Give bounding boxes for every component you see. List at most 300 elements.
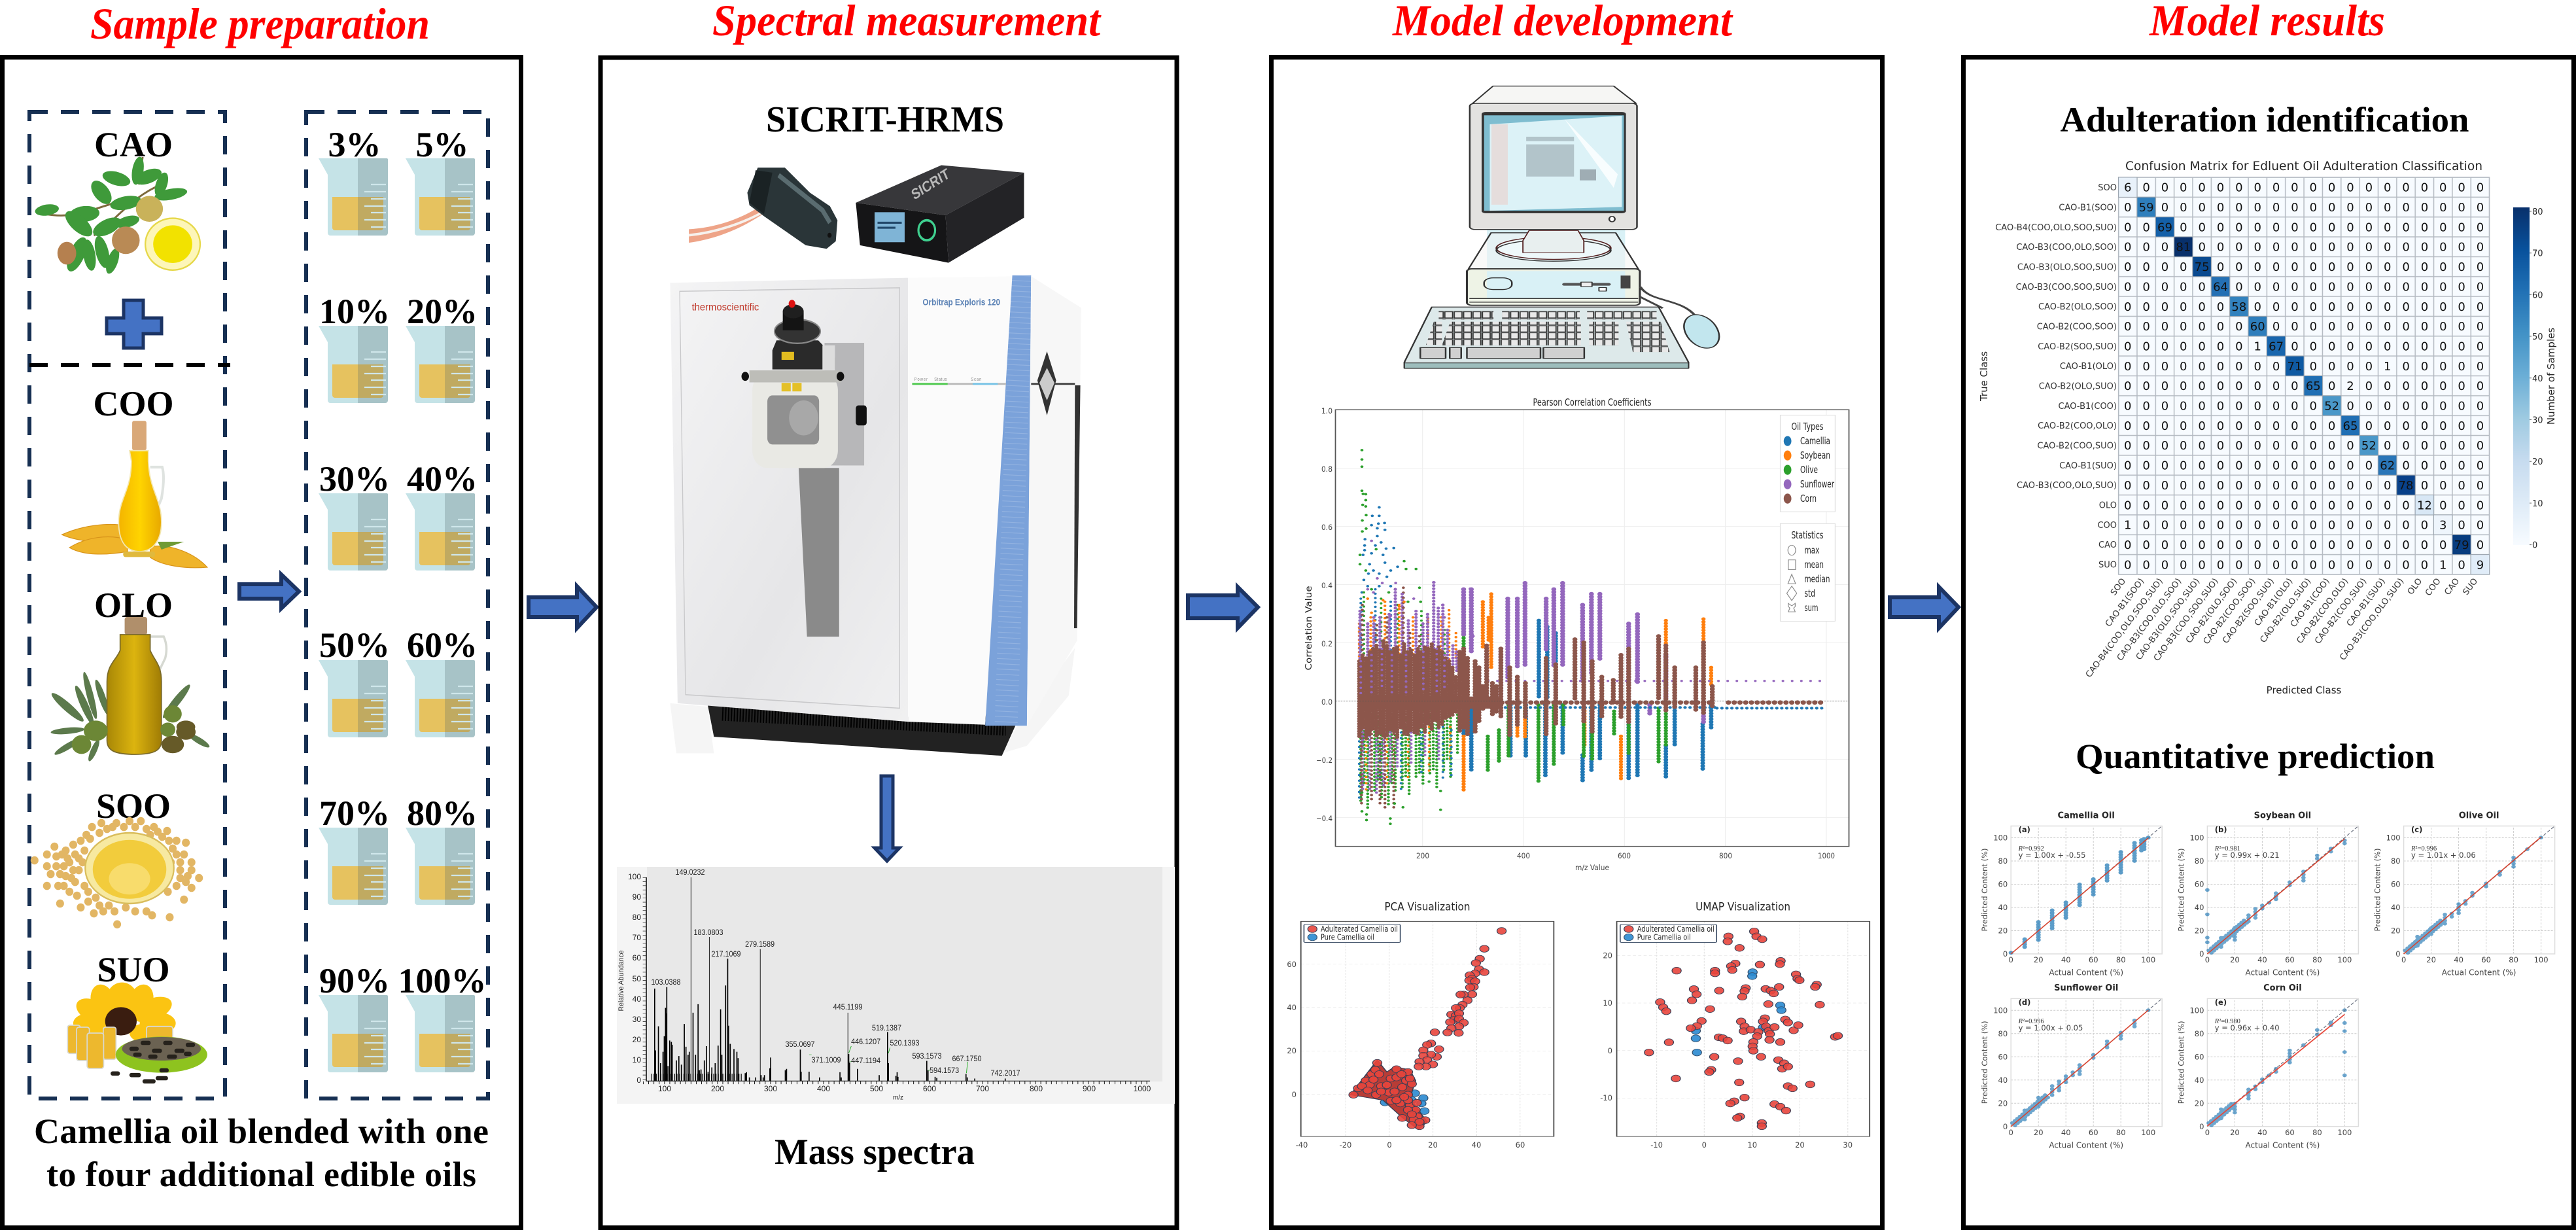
chart: Corn oil regression: 20	[2230, 1128, 2240, 1137]
label: 10%: 10%	[319, 292, 390, 331]
chart: mass spectrum: 20	[633, 1035, 641, 1044]
chart: Pearson correlation scatter: −0.2	[1316, 756, 1332, 765]
label: 3%: 3%	[328, 125, 381, 164]
chart: UMAP visualization: -10	[1650, 1140, 1663, 1150]
chart: UMAP visualization: 10	[1603, 998, 1612, 1008]
chart: mass spectrum: 446.1207	[851, 1037, 880, 1046]
true class labels: COO	[2097, 521, 2117, 531]
chart: Soybean oil regression: Predicted Content (%)	[2176, 849, 2185, 931]
arrow: instrument to spectra	[875, 776, 899, 861]
colorbar	[2513, 207, 2557, 551]
chart: Corn oil regression: 80	[2195, 1029, 2204, 1038]
chart: PCA visualization: 20	[1428, 1140, 1438, 1150]
chart: Pearson correlation scatter: Corn	[1800, 493, 1817, 504]
title: sample preparation: Sample preparation	[90, 0, 430, 48]
true class labels: CAO-B1(OLO)	[2060, 362, 2117, 372]
chart: PCA visualization: 20	[1287, 1046, 1297, 1055]
true class labels: CAO-B2(COO,SUO)	[2037, 441, 2117, 451]
chart: PCA visualization: Pure Camellia oil	[1321, 933, 1374, 942]
chart: Pearson correlation scatter: Oil Types	[1791, 421, 1824, 432]
predicted class labels: OLO	[2406, 576, 2424, 597]
icon: sunflower seeds and oil	[67, 981, 207, 1081]
chart: PCA visualization: 0	[1292, 1090, 1297, 1099]
chart: mass spectrum: 600	[923, 1084, 936, 1093]
beaker row 5	[319, 828, 475, 905]
predicted class labels: CAO-B3(COO,OLO,SOO)	[2115, 576, 2184, 663]
chart: UMAP visualization: 0	[1702, 1140, 1707, 1150]
predicted class labels: CAO-B2(OLO,SOO)	[2184, 576, 2239, 645]
label: SOO: SOO	[96, 786, 171, 826]
icon: desktop computer	[1404, 86, 1725, 368]
predicted class labels	[2084, 576, 2480, 680]
matrix cell values: 0 0 0 0 0 0 0 0 0 0 0 0 0 0 0 0 0 1 0 9	[2124, 558, 2484, 572]
chart: Camellia oil regression: 80	[2116, 955, 2126, 964]
true class labels: OLO	[2099, 501, 2117, 510]
chart: Camellia oil regression: (a)	[2019, 825, 2030, 834]
panel: spectral measurement	[600, 58, 1177, 1227]
matrix cell values: 0 0 0 0 0 64 0 0 0 0 0 0 0 0 0 0 0 0 0 0	[2124, 280, 2484, 294]
matrix cell values: 0 0 0 0 0 0 0 1 67 0 0 0 0 0 0 0 0 0 0 0	[2124, 340, 2484, 353]
matrix cell values: 0 0 0 0 0 0 0 0 0 0 0 0 65 0 0 0 0 0 0 0	[2124, 419, 2484, 433]
chart: Sunflower oil regression: Actual Content (%)	[2049, 1140, 2123, 1150]
chart: Corn oil regression: (e)	[2215, 998, 2227, 1007]
chart: Corn oil regression: y = 0.96x + 0.40	[2215, 1023, 2280, 1032]
chart: Sunflower oil regression: y = 1.00x + 0.05	[2019, 1023, 2083, 1032]
chart: Soybean oil regression: 20	[2230, 955, 2240, 964]
dashed box: oil types	[29, 112, 230, 1098]
chart: Corn oil regression: Predicted Content (%)	[2176, 1021, 2185, 1104]
chart: Pearson correlation scatter: max	[1804, 544, 1820, 556]
chart: Soybean oil regression: 100	[2189, 834, 2204, 843]
chart: Sunflower oil regression: Sunflower Oil	[2054, 983, 2118, 993]
chart: mass spectrum: 103.0388	[652, 977, 681, 987]
predicted class labels: CAO-B1(SUO)	[2345, 576, 2388, 629]
label: 100%: 100%	[398, 961, 487, 1000]
matrix cell values: 1 0 0 0 0 0 0 0 0 0 0 0 0 0 0 0 0 3 0 0	[2124, 519, 2484, 533]
chart: Sunflower oil regression: (d)	[2019, 998, 2030, 1007]
chart: Olive oil regression: 100	[2386, 834, 2401, 843]
chart: Olive oil regression: 80	[2391, 856, 2401, 866]
icon: Orbitrap mass spectrometer	[670, 275, 1081, 756]
predicted class labels: CAO	[2443, 576, 2462, 597]
chart: mass spectrum: 50	[633, 974, 641, 983]
label: 80%: 80%	[407, 794, 478, 833]
true class labels: SUO	[2098, 560, 2117, 571]
chart: mass spectrum: 217.1069	[712, 949, 741, 958]
chart: Camellia oil regression: 0	[2003, 949, 2008, 958]
chart: Camellia oil regression: 100	[2141, 955, 2155, 964]
chart: mass spectrum: 355.0697	[785, 1040, 815, 1049]
chart: Pearson correlation scatter: 0.4	[1321, 581, 1332, 590]
chart: Sunflower oil regression: Predicted Content (%)	[1980, 1021, 1989, 1104]
predicted class labels: CAO-B2(COO,SOO)	[2202, 576, 2257, 646]
chart: PCA visualization: 40	[1472, 1140, 1481, 1150]
chart: Soybean oil regression: 0	[2199, 949, 2204, 958]
chart: Corn oil regression: Actual Content (%)	[2246, 1140, 2320, 1150]
chart: Olive oil regression: R²=0.996	[2411, 845, 2437, 852]
chart: Sunflower oil regression: 60	[1998, 1052, 2008, 1061]
true class labels: CAO-B1(SOO)	[2059, 203, 2117, 213]
matrix cell values: 0 0 0 81 0 0 0 0 0 0 0 0 0 0 0 0 0 0 0 0	[2124, 241, 2484, 255]
chart: Corn oil regression: 0	[2199, 1122, 2204, 1131]
panel frame	[1964, 58, 2573, 1227]
chart: Soybean oil regression: Soybean Oil	[2254, 811, 2311, 820]
chart: Soybean oil regression: (b)	[2215, 825, 2227, 834]
icon: Orbitrap mass spectrometer: Scan	[971, 378, 982, 382]
chart: PCA visualization	[1287, 900, 1554, 1150]
predicted class labels: CAO-B3(OLO,SOO,SUO)	[2134, 576, 2202, 662]
chart: Pearson correlation scatter: Statistics	[1791, 529, 1824, 541]
label: 70%: 70%	[319, 794, 390, 833]
chart: mass spectrum: 1000	[1134, 1084, 1151, 1093]
colorbar: 30	[2532, 416, 2543, 425]
icon: SICRIT control unit: SICRIT	[909, 166, 952, 203]
panel frame	[3, 58, 521, 1227]
chart: confusion matrix	[1978, 159, 2557, 696]
chart: Soybean oil regression: 100	[2337, 955, 2352, 964]
chart: Pearson correlation scatter: Sunflower	[1800, 478, 1835, 490]
chart: Soybean oil regression: 40	[2257, 955, 2267, 964]
chart: mass spectrum: 445.1199	[833, 1002, 863, 1011]
chart: mass spectrum: 70	[633, 933, 641, 942]
chart: Camellia oil regression: 40	[2061, 955, 2071, 964]
caption: Camellia oil blended with one	[34, 1112, 489, 1151]
chart: mass spectrum: 100	[658, 1084, 671, 1093]
chart: Pearson correlation scatter: Pearson Correlation Coefficients	[1533, 396, 1652, 408]
chart: Sunflower oil regression: 40	[1998, 1076, 2008, 1085]
chart: Corn oil regression: 60	[2195, 1052, 2204, 1061]
chart: Pearson correlation scatter: Soybean	[1800, 449, 1830, 461]
label: 30%: 30%	[319, 459, 390, 499]
chart: Sunflower oil regression: R²=0.996	[2018, 1018, 2044, 1025]
chart: Olive oil regression: 0	[2401, 955, 2406, 964]
matrix cell values	[2124, 181, 2484, 572]
chart: confusion matrix: True Class	[1978, 351, 1990, 402]
colorbar: 60	[2532, 290, 2543, 300]
panel: sample preparation	[3, 58, 521, 1227]
predicted class labels: CAO-B1(SOO)	[2104, 576, 2146, 629]
matrix cell values: 0 0 0 0 0 0 0 0 0 0 0 0 0 0 0 0 12 0 0 0	[2124, 499, 2484, 512]
chart: Pearson correlation scatter: Correlation Value	[1304, 586, 1314, 670]
label: 5%: 5%	[416, 125, 468, 164]
chart: Camellia oil regression: Predicted Content (%)	[1980, 849, 1989, 931]
icon: SICRIT ion source probe	[689, 167, 837, 249]
true class labels: CAO-B1(SUO)	[2059, 461, 2117, 471]
colorbar: 70	[2532, 249, 2543, 259]
true class labels: CAO-B2(OLO,SUO)	[2039, 382, 2117, 391]
chart: mass spectrum: 10	[633, 1055, 641, 1064]
chart: Camellia oil regression: y = 1.00x + -0.55	[2019, 851, 2085, 860]
label: 20%: 20%	[407, 292, 478, 331]
predicted class labels: CAO-B3(COO,OLO,SUO)	[2338, 576, 2406, 663]
chart: mass spectrum: 80	[633, 913, 641, 922]
label: 90%: 90%	[319, 961, 390, 1000]
heading: quantitative prediction: Quantitative prediction	[2076, 737, 2435, 776]
chart: PCA visualization: 0	[1387, 1140, 1392, 1150]
chart: Corn oil regression: 20	[2195, 1098, 2204, 1108]
beaker row 2	[319, 326, 475, 403]
chart: Corn oil regression: 100	[2189, 1006, 2204, 1015]
chart: Sunflower oil regression: 80	[1998, 1029, 2008, 1038]
chart: Camellia oil regression: Actual Content (%)	[2049, 968, 2123, 977]
true class labels: CAO-B2(SOO,SUO)	[2038, 342, 2117, 352]
chart: mass spectrum: 30	[633, 1015, 641, 1024]
matrix cell values: 0 0 0 0 0 0 0 0 0 0 0 0 0 0 0 0 0 0 79 0	[2124, 538, 2484, 552]
chart: Olive oil regression: Actual Content (%)	[2442, 968, 2516, 977]
chart: Sunflower oil regression: 0	[2003, 1122, 2008, 1131]
chart: UMAP visualization: Adulterated Camellia oil	[1637, 924, 1714, 934]
chart: Camellia oil regression: 40	[1998, 903, 2008, 912]
chart: Corn oil regression: 60	[2285, 1128, 2295, 1137]
chart: Pearson correlation scatter: std	[1804, 588, 1815, 599]
chart: Olive oil regression: (c)	[2411, 825, 2422, 834]
chart: PCA visualization: 60	[1287, 960, 1297, 969]
colorbar: 0	[2532, 541, 2537, 551]
true class labels: CAO	[2098, 540, 2117, 550]
chart: Pearson correlation scatter: 200	[1416, 851, 1429, 860]
matrix cell values: 0 0 0 0 0 0 0 0 0 0 0 0 0 52 0 0 0 0 0 0	[2124, 439, 2484, 453]
chart: Soybean oil regression: 80	[2312, 955, 2322, 964]
colorbar: 80	[2532, 207, 2543, 217]
chart: Pearson correlation scatter: 1000	[1818, 851, 1835, 860]
chart: mass spectrum: 90	[633, 892, 641, 902]
chart: UMAP visualization: 20	[1603, 951, 1612, 960]
matrix cell values: 6 0 0 0 0 0 0 0 0 0 0 0 0 0 0 0 0 0 0 0	[2124, 181, 2484, 195]
icon: soybeans and oil	[35, 821, 199, 924]
chart: Sunflower oil regression: 100	[1993, 1006, 2008, 1015]
icon: camellia branch and oil	[34, 156, 200, 275]
chart: mass spectrum: 667.1750	[952, 1054, 982, 1063]
chart: Pearson correlation scatter: 1.0	[1321, 406, 1332, 415]
chart: Pearson correlation scatter: 0.8	[1321, 465, 1332, 474]
true class labels: CAO-B3(OLO,SOO,SUO)	[2017, 263, 2117, 272]
true class labels	[1995, 183, 2117, 571]
chart: Corn oil regression: 80	[2312, 1128, 2322, 1137]
matrix cell values: 0 0 0 0 0 0 0 0 0 71 0 0 0 0 1 0 0 0 0 0	[2124, 360, 2484, 374]
chart: Sunflower oil regression: 40	[2061, 1128, 2071, 1137]
true class labels: CAO-B2(OLO,SOO)	[2038, 302, 2117, 312]
matrix cell values: 0 0 0 0 75 0 0 0 0 0 0 0 0 0 0 0 0 0 0 0	[2124, 260, 2484, 274]
chart: Pearson correlation scatter	[1304, 396, 1849, 872]
chart: Olive oil regression: 20	[2426, 955, 2436, 964]
chart: Camellia oil regression: 80	[1998, 856, 2008, 866]
icon: olive oil bottle	[49, 617, 211, 762]
caption: mass spectra: Mass spectra	[775, 1132, 975, 1172]
chart: mass spectrum: 100	[628, 872, 641, 881]
chart: Camellia oil regression: R²=0.992	[2018, 845, 2044, 852]
chart: mass spectrum: 520.1393	[890, 1038, 920, 1047]
chart: mass spectrum: 593.1573	[912, 1051, 942, 1061]
matrix cell values: 0 0 0 0 0 0 0 0 0 0 0 0 0 0 0 78 0 0 0 0	[2124, 479, 2484, 493]
chart: mass spectrum: 447.1194	[851, 1056, 880, 1065]
chart: PCA visualization: 40	[1287, 1003, 1297, 1012]
chart: mass spectrum: 183.0803	[693, 928, 723, 937]
chart: Soybean oil regression: R²=0.981	[2214, 845, 2240, 852]
group: blend percentage beakers	[319, 125, 487, 1072]
icon: corn oil bottle	[62, 421, 207, 568]
arrow: measurement to model	[1188, 587, 1258, 628]
chart: Pearson correlation scatter: 400	[1517, 851, 1530, 860]
chart: Corn oil regression: 0	[2205, 1128, 2210, 1137]
chart: Camellia oil regression: 20	[1998, 926, 2008, 936]
chart: Sunflower oil regression: 100	[2141, 1128, 2155, 1137]
predicted class labels: CAO-B3(COO,SOO,SUO)	[2152, 576, 2221, 663]
chart: Pearson correlation scatter: 0.2	[1321, 639, 1332, 648]
chart: Corn oil regression: R²=0.980	[2214, 1018, 2240, 1025]
predicted class labels: CAO-B1(COO)	[2289, 576, 2332, 629]
chart: Pearson correlation scatter: Camellia	[1800, 435, 1830, 447]
chart: Pearson correlation scatter: 0.0	[1321, 697, 1332, 707]
chart: Corn oil regression: 100	[2337, 1128, 2352, 1137]
icon: Orbitrap mass spectrometer: Power	[914, 378, 928, 382]
caption: to four additional edible oils	[46, 1155, 476, 1194]
true class labels: CAO-B2(COO,SOO)	[2037, 322, 2117, 332]
matrix cell values: 0 0 0 0 0 0 0 60 0 0 0 0 0 0 0 0 0 0 0 0	[2124, 320, 2484, 334]
icon: Orbitrap mass spectrometer: Status	[934, 378, 947, 382]
chart: UMAP visualization: 20	[1795, 1140, 1805, 1150]
chart: mass spectrum: 279.1589	[745, 940, 775, 949]
colorbar: 20	[2532, 457, 2543, 467]
chart: Soybean oil regression: 40	[2195, 903, 2204, 912]
predicted class labels: COO	[2424, 576, 2443, 598]
true class labels: SOO	[2098, 183, 2117, 193]
predicted class labels: CAO-B2(COO,OLO)	[2295, 576, 2350, 646]
chart: Olive oil regression: 100	[2534, 955, 2549, 964]
chart: confusion matrix: Predicted Class	[2267, 684, 2342, 696]
chart: Soybean oil regression: 60	[2285, 955, 2295, 964]
dashed box: blend ratios	[306, 112, 488, 1098]
chart: Pearson correlation scatter: 0.6	[1321, 523, 1332, 532]
chart: Sunflower oil regression: 0	[2009, 1128, 2013, 1137]
chart: mass spectrum: 0	[636, 1076, 641, 1085]
chart: mass spectrum: 60	[633, 953, 641, 962]
icon: Orbitrap mass spectrometer: Orbitrap Exploris 120	[922, 298, 1000, 308]
chart: mass spectrum	[617, 867, 1175, 1104]
chart: Pearson correlation scatter: median	[1804, 573, 1830, 585]
chart: mass spectrum: 500	[870, 1084, 883, 1093]
chart: Olive oil regression: 60	[2391, 879, 2401, 888]
beaker row 4	[319, 660, 475, 737]
chart: Camellia oil regression: 100	[1993, 834, 2008, 843]
chart: Olive oil regression: 60	[2481, 955, 2491, 964]
chart: Olive oil regression: 20	[2391, 926, 2401, 936]
chart: mass spectrum: Relative Abundance	[618, 950, 625, 1011]
true class labels: CAO-B1(COO)	[2059, 402, 2117, 412]
panel: model development	[1272, 58, 1883, 1227]
chart: Pearson correlation scatter: m/z Value	[1575, 863, 1609, 872]
icon: Orbitrap mass spectrometer: thermoscientific	[692, 301, 759, 313]
chart: Sunflower oil regression: 20	[1998, 1098, 2008, 1108]
chart: UMAP visualization: Pure Camellia oil	[1637, 933, 1691, 942]
chart: Soybean oil regression: y = 0.99x + 0.21	[2215, 851, 2280, 860]
predicted class labels: SOO	[2109, 576, 2128, 597]
chart: Corn oil regression: 40	[2195, 1076, 2204, 1085]
chart: confusion matrix: Confusion Matrix for Edluent Oil Adulteration Classification	[2125, 159, 2482, 173]
chart: Olive oil regression: 80	[2509, 955, 2518, 964]
predicted class labels: CAO-B1(OLO)	[2253, 576, 2295, 628]
chart: Olive oil regression: y = 1.01x + 0.06	[2411, 851, 2476, 860]
beaker row 3	[319, 493, 475, 571]
true class labels: CAO-B3(COO,OLO,SUO)	[2017, 481, 2117, 491]
panel frame	[1272, 58, 1883, 1227]
chart: UMAP visualization	[1600, 900, 1870, 1150]
chart: mass spectrum: 900	[1083, 1084, 1096, 1093]
chart: Pearson correlation scatter: Olive	[1800, 464, 1818, 476]
chart: Camellia oil regression: 20	[2034, 955, 2044, 964]
chart: PCA visualization: Adulterated Camellia oil	[1321, 924, 1398, 934]
chart: mass spectrum: 400	[817, 1084, 830, 1093]
chart: PCA visualization: -20	[1340, 1140, 1351, 1150]
chart: mass spectrum: 594.1573	[930, 1066, 959, 1075]
predicted class labels: CAO-B4(COO,OLO,SOO,SUO)	[2084, 576, 2165, 680]
chart: Sunflower oil regression: 60	[2089, 1128, 2098, 1137]
heading: SICRIT-HRMS: SICRIT-HRMS	[766, 99, 1004, 140]
chart: Pearson correlation scatter: mean	[1804, 559, 1824, 571]
chart: mass spectrum: 200	[711, 1084, 724, 1093]
colorbar: 40	[2532, 374, 2543, 384]
true class labels: CAO-B4(COO,OLO,SOO,SUO)	[1995, 223, 2117, 233]
chart: Soybean oil regression: 20	[2195, 926, 2204, 936]
matrix cell values: 0 0 0 0 0 0 58 0 0 0 0 0 0 0 0 0 0 0 0 0	[2124, 300, 2484, 314]
chart: mass spectrum: 149.0232	[675, 868, 705, 877]
chart: Camellia oil regression: 60	[1998, 879, 2008, 888]
chart: mass spectrum: m/z	[893, 1094, 903, 1102]
icon: plus	[107, 300, 162, 348]
chart: Camellia oil regression	[1980, 811, 2162, 977]
chart: mass spectrum: 519.1387	[872, 1023, 901, 1032]
chart: Camellia oil regression: 0	[2009, 955, 2013, 964]
colorbar: 10	[2532, 499, 2543, 509]
chart: Pearson correlation scatter: 600	[1618, 851, 1631, 860]
chart: Olive oil regression: Olive Oil	[2459, 811, 2499, 820]
chart: Corn oil regression	[2176, 983, 2358, 1150]
predicted class labels: SUO	[2461, 576, 2480, 597]
matrix cell values: 0 59 0 0 0 0 0 0 0 0 0 0 0 0 0 0 0 0 0 0	[2124, 201, 2484, 215]
chart: UMAP visualization: 0	[1608, 1046, 1612, 1055]
label: CAO: CAO	[94, 125, 173, 164]
chart: mass spectrum: 800	[1030, 1084, 1043, 1093]
chart: Camellia oil regression: 60	[2089, 955, 2098, 964]
chart: mass spectrum: 371.1009	[811, 1055, 841, 1064]
chart: mass spectrum: 300	[764, 1084, 777, 1093]
chart: Soybean oil regression	[2176, 811, 2358, 977]
chart: Pearson correlation scatter: 800	[1719, 851, 1732, 860]
chart: UMAP visualization: UMAP Visualization	[1696, 900, 1790, 913]
chart: Soybean oil regression: 60	[2195, 879, 2204, 888]
predicted class labels: CAO-B2(OLO,SUO)	[2258, 576, 2313, 645]
arrow: model to results	[1890, 587, 1958, 628]
panel frame	[600, 58, 1177, 1227]
chart: UMAP visualization: -10	[1600, 1093, 1612, 1102]
true class labels: CAO-B3(COO,OLO,SOO)	[2016, 243, 2117, 253]
colorbar: Number of Samples	[2545, 328, 2557, 425]
chart: Corn oil regression: Corn Oil	[2263, 983, 2302, 993]
beaker row 6	[319, 995, 475, 1072]
chart: PCA visualization: -40	[1296, 1140, 1308, 1150]
colorbar: 50	[2532, 332, 2543, 342]
chart: Camellia oil regression: Camellia Oil	[2058, 811, 2115, 820]
panel: model results	[1964, 58, 2573, 1227]
icon: SICRIT control unit	[856, 165, 1024, 263]
matrix cell values: 0 0 0 0 0 0 0 0 0 0 0 52 0 0 0 0 0 0 0 0	[2124, 399, 2484, 413]
arrow: preparation to measurement	[529, 586, 597, 628]
true class labels: CAO-B3(COO,SOO,SUO)	[2016, 283, 2117, 292]
chart: PCA visualization: 60	[1516, 1140, 1525, 1150]
chart: PCA visualization: PCA Visualization	[1384, 900, 1471, 913]
chart: Olive oil regression: 40	[2454, 955, 2463, 964]
label: OLO: OLO	[94, 586, 173, 625]
label: SUO: SUO	[97, 950, 170, 989]
